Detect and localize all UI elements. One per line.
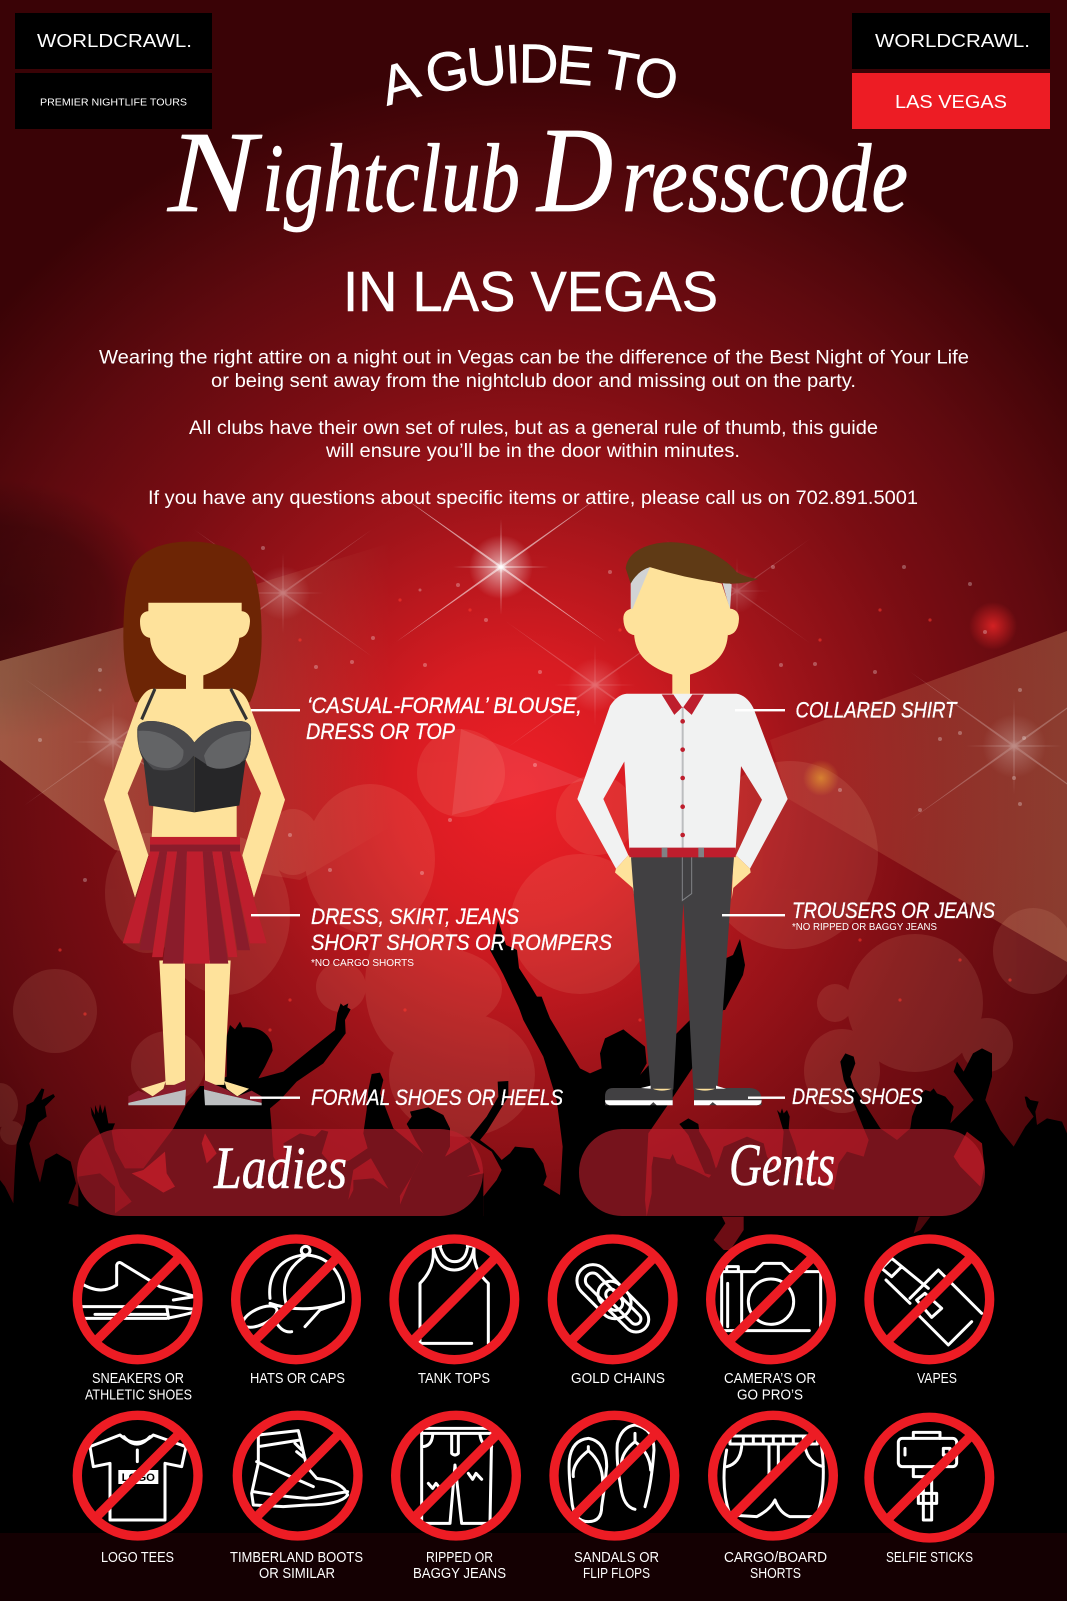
item labels: GOLD CHAINS	[571, 1370, 665, 1387]
icon: boot	[237, 1415, 358, 1536]
intro text: All clubs have their own set of rules, but as a general rule of thumb, this guide	[189, 417, 878, 439]
icon: cap	[236, 1239, 356, 1360]
dark red crowd gaps	[714, 1217, 930, 1250]
head and neck	[140, 603, 250, 691]
callout: shirt: COLLARED SHIRT	[796, 698, 958, 722]
callout: skirt	[251, 904, 612, 969]
belt	[629, 848, 736, 857]
head and neck	[633, 567, 730, 696]
item labels: RIPPED OR	[426, 1549, 493, 1566]
callout: heels: FORMAL SHOES OR HEELS	[311, 1085, 563, 1110]
title line: nightclub dresscode: N	[167, 109, 262, 237]
top	[137, 689, 251, 812]
item labels: SNEAKERS OR	[92, 1370, 184, 1387]
figure: woman	[104, 541, 285, 1105]
icon: logo tee: LOGO	[122, 1472, 155, 1484]
item labels: ATHLETIC SHOES	[85, 1386, 192, 1403]
placket	[682, 708, 684, 849]
title line: in las vegas: IN LAS VEGAS	[343, 260, 718, 324]
icon: shorts	[713, 1415, 833, 1536]
banner: gents	[579, 1129, 985, 1216]
title	[166, 44, 908, 324]
banner: gents: Gents	[729, 1132, 835, 1198]
hair	[123, 541, 262, 702]
callout: skirt: SHORT SHORTS OR ROMPERS	[311, 930, 612, 955]
hands over skirt	[130, 855, 257, 897]
collar	[662, 695, 704, 715]
city box: LAS VEGAS	[895, 92, 1007, 112]
crowd centre	[353, 990, 743, 1217]
logo: worldcrawl right	[852, 13, 1050, 69]
item labels: CAMERA’S OR	[724, 1370, 816, 1387]
icon: camera	[711, 1239, 831, 1360]
logo: worldcrawl left: WORLDCRAWL.	[37, 31, 192, 51]
sideburns	[631, 564, 732, 610]
icon: flip flops	[554, 1415, 675, 1536]
legs	[159, 961, 231, 1085]
item labels	[85, 1370, 973, 1582]
central light facet	[452, 729, 585, 815]
bokeh lights	[0, 729, 1067, 1145]
intro text	[99, 346, 969, 509]
red sparkles	[58, 598, 1012, 1032]
callout: blouse	[251, 693, 582, 744]
raised arm tops	[490, 920, 745, 1010]
banned items right half	[552, 1239, 990, 1538]
sparkles	[38, 546, 1026, 882]
intro text: If you have any questions about specific items or attire, please call us on 702.891.5001	[148, 487, 918, 509]
right light beam	[770, 631, 1067, 962]
callout: blouse: DRESS OR TOP	[306, 719, 455, 744]
intro text: Wearing the right attire on a night out in Vegas can be the difference of the Best Night of Your Life	[99, 346, 969, 368]
logo: worldcrawl right: WORLDCRAWL.	[875, 31, 1030, 51]
banner: ladies: Ladies	[213, 1135, 347, 1201]
icon: jeans	[396, 1415, 516, 1536]
icon: gold chain	[552, 1239, 673, 1360]
item labels: BAGGY JEANS	[413, 1565, 506, 1582]
banner: ladies	[77, 1129, 483, 1216]
item labels: SELFIE STICKS	[886, 1549, 973, 1566]
icon: logo tee	[77, 1415, 198, 1536]
item labels: OR SIMILAR	[259, 1565, 335, 1582]
ears	[623, 608, 739, 635]
intro text: will ensure you’ll be in the door within minutes.	[325, 440, 740, 462]
tagline box	[15, 73, 212, 129]
shirt	[577, 694, 788, 869]
tagline box: PREMIER NIGHTLIFE TOURS	[40, 96, 187, 108]
title line: a guide to: A GUIDE TO	[386, 44, 676, 106]
fly	[682, 857, 692, 900]
figure: man	[577, 542, 788, 1105]
callout: skirt: DRESS, SKIRT, JEANS	[311, 904, 519, 929]
callout: blouse: ‘CASUAL-FORMAL’ BLOUSE,	[307, 693, 582, 718]
item labels: LOGO TEES	[101, 1549, 174, 1566]
crowd silhouette	[0, 920, 1067, 1250]
item labels: FLIP FLOPS	[583, 1565, 650, 1582]
icon: selfie stick	[869, 1417, 990, 1538]
dark left shade	[0, 470, 170, 740]
item labels: TANK TOPS	[418, 1370, 490, 1387]
buttons	[680, 719, 685, 837]
heels	[128, 1080, 262, 1105]
item labels: HATS OR CAPS	[250, 1370, 345, 1387]
title line: nightclub dresscode: ightclub	[262, 125, 520, 233]
crowd left	[0, 1003, 400, 1250]
skirt	[123, 837, 267, 964]
callout: trousers: TROUSERS OR JEANS	[792, 898, 995, 923]
logo: worldcrawl left	[15, 13, 212, 69]
callout: trousers	[722, 898, 995, 933]
title line: nightclub dresscode: resscode	[622, 125, 908, 233]
item labels: CARGO/BOARD	[724, 1549, 827, 1566]
black lower band	[0, 1216, 1067, 1533]
crowd right	[664, 1048, 1067, 1217]
callout: dress shoes: DRESS SHOES	[792, 1084, 923, 1109]
trousers	[631, 857, 734, 1090]
item labels: TIMBERLAND BOOTS	[230, 1549, 363, 1566]
item labels: VAPES	[917, 1370, 957, 1387]
dress shoes	[605, 1086, 762, 1105]
icon: tank top	[394, 1239, 515, 1360]
callout: skirt: *NO CARGO SHORTS	[311, 957, 414, 969]
item labels: GO PRO’S	[737, 1386, 803, 1403]
callout: trousers: *NO RIPPED OR BAGGY JEANS	[792, 921, 937, 933]
hair	[626, 542, 758, 584]
item labels: SANDALS OR	[574, 1549, 659, 1566]
title line: nightclub dresscode: D	[535, 103, 613, 238]
banned items left half	[77, 1239, 516, 1536]
body and arms	[104, 689, 285, 897]
icon: vape	[869, 1239, 990, 1360]
left light beam	[0, 540, 500, 880]
city box	[852, 73, 1050, 129]
intro text: or being sent away from the nightclub door and missing out on the party.	[211, 370, 856, 392]
star flares	[24, 492, 1067, 821]
footer band	[0, 1533, 1067, 1601]
icon: sneaker	[77, 1239, 199, 1360]
hands	[615, 855, 751, 899]
item labels: SHORTS	[750, 1565, 801, 1582]
